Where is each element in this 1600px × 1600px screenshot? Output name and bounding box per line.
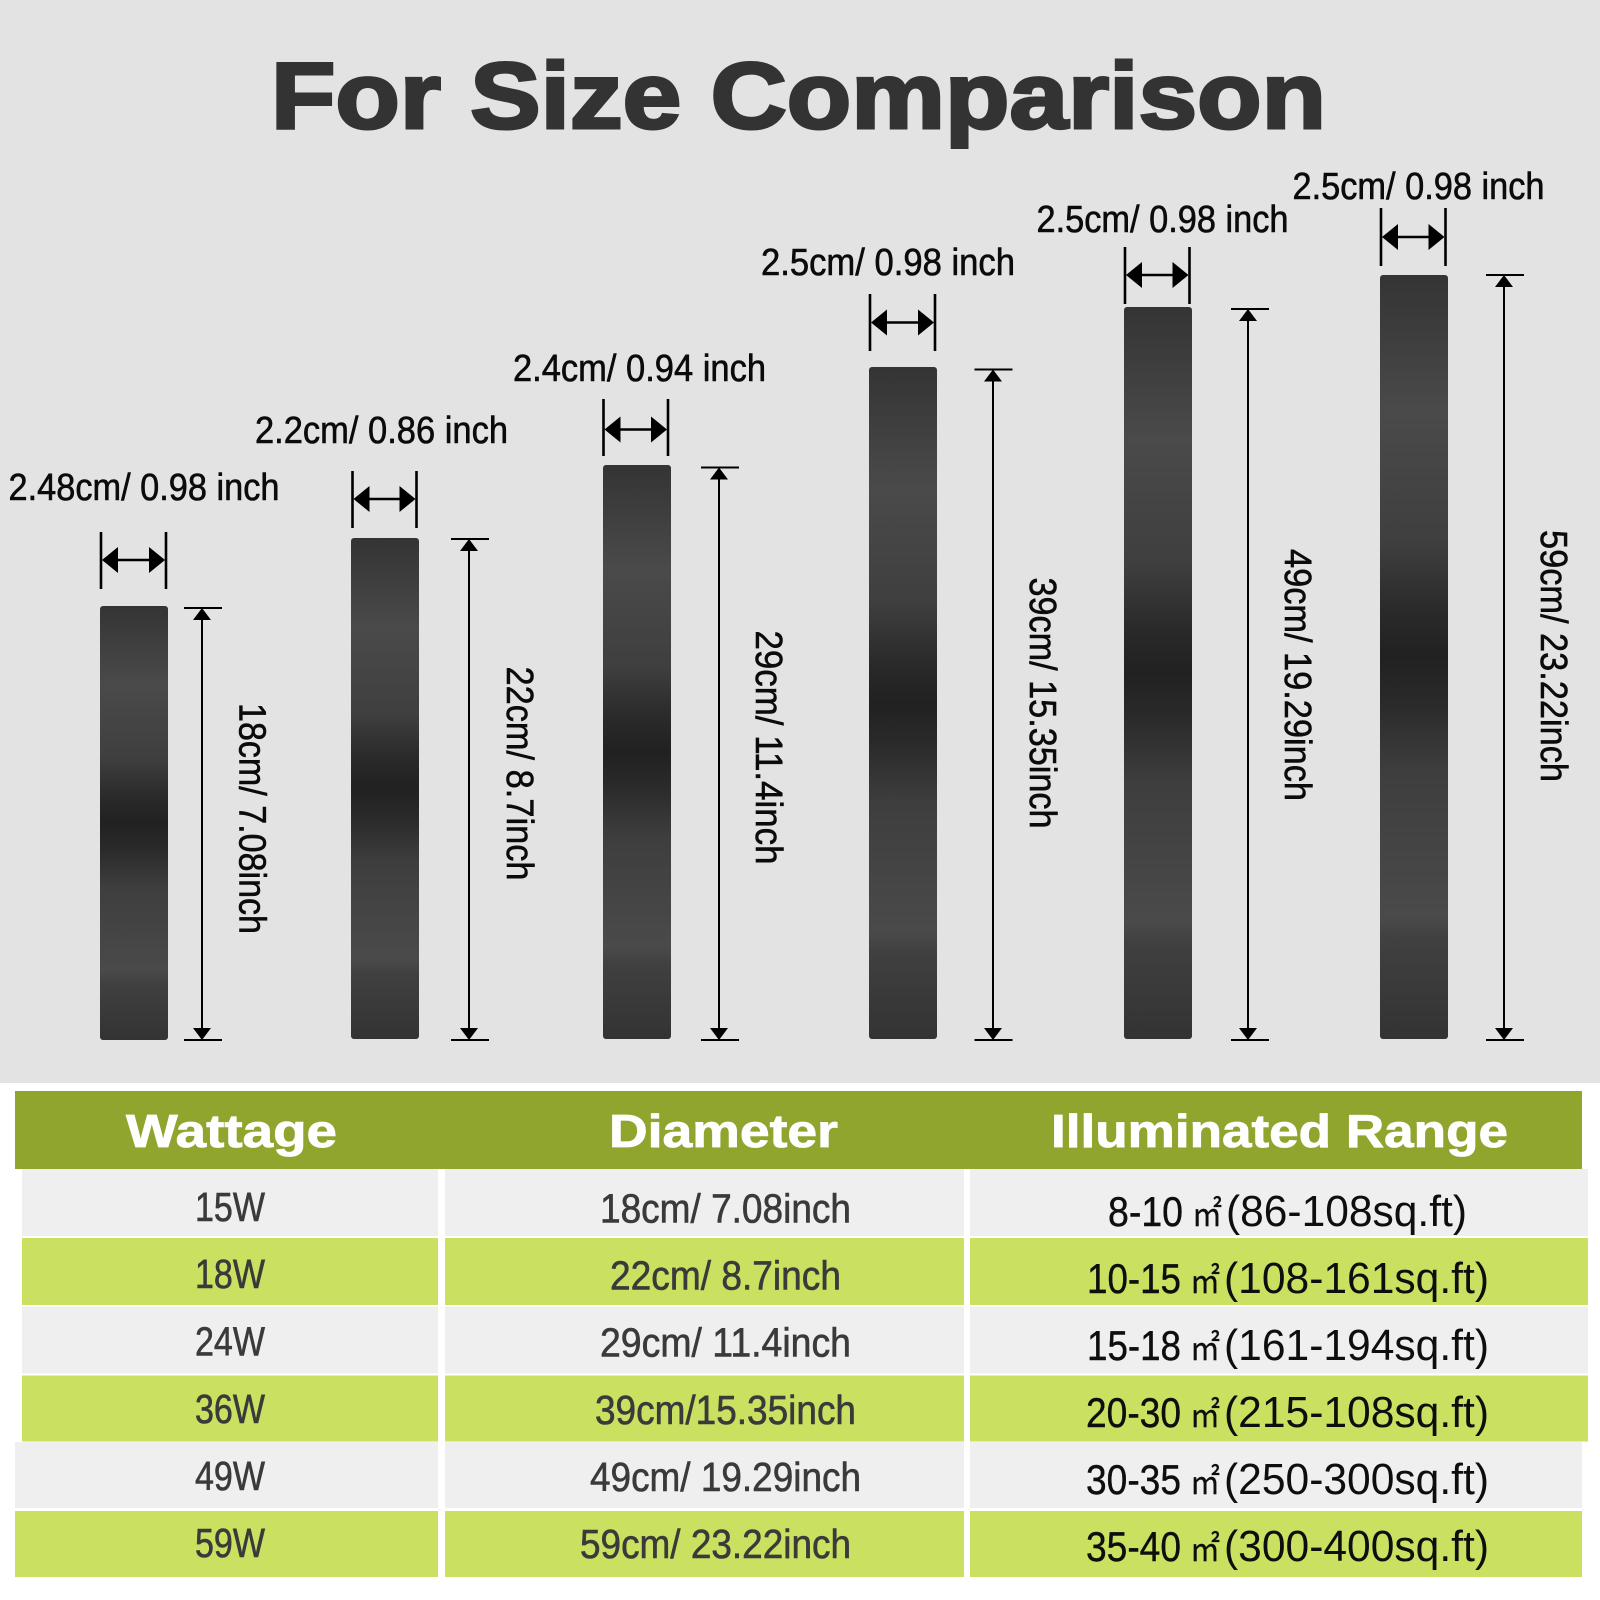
table row 49W: (250-300sq.ft) xyxy=(1224,1455,1489,1504)
lamp bar 18W xyxy=(351,538,419,1039)
table row 49W xyxy=(15,1442,1582,1508)
table row 49W: 49cm/ 19.29inch xyxy=(590,1454,861,1500)
table row 49W: 30-35 xyxy=(1086,1456,1181,1503)
table row 59W: 59W xyxy=(195,1520,265,1566)
table row 36W: ㎡ xyxy=(1190,1397,1220,1435)
lamp bar 49W xyxy=(1124,307,1192,1039)
table row 15W: ㎡ xyxy=(1192,1196,1222,1234)
height arrow 18W xyxy=(451,539,489,1040)
table row 36W: 36W xyxy=(195,1386,265,1432)
table row 24W: 29cm/ 11.4inch xyxy=(600,1320,851,1366)
lamp bar 36W xyxy=(869,367,937,1039)
height label 24W: 29cm/ 11.4inch xyxy=(747,630,789,864)
width arrow 15W xyxy=(101,532,166,589)
height label 49W: 49cm/ 19.29inch xyxy=(1276,549,1318,801)
table row 15W: 15W xyxy=(195,1184,265,1230)
title: For Size Comparison xyxy=(271,43,1326,148)
group: 36W lamp size xyxy=(761,242,1063,1040)
table row 49W: 49W xyxy=(195,1453,265,1499)
group: 59W lamp size xyxy=(1292,166,1574,1040)
width arrow 59W xyxy=(1381,208,1446,266)
lamp bar 59W xyxy=(1380,275,1448,1039)
table row 59W: 59cm/ 23.22inch xyxy=(580,1521,851,1567)
table header: Illuminated Range xyxy=(1051,1105,1508,1157)
table row 18W: ㎡ xyxy=(1190,1263,1220,1301)
width label 18W: 2.2cm/ 0.86 inch xyxy=(255,410,508,452)
width label 36W: 2.5cm/ 0.98 inch xyxy=(761,242,1015,284)
width label 24W: 2.4cm/ 0.94 inch xyxy=(513,348,766,390)
width arrow 24W xyxy=(604,399,668,456)
group: 49W lamp size xyxy=(1036,199,1318,1040)
width arrow 36W xyxy=(870,294,935,351)
table row 18W: (108-161sq.ft) xyxy=(1224,1254,1489,1303)
height label 18W: 22cm/ 8.7inch xyxy=(498,666,540,880)
width label 49W: 2.5cm/ 0.98 inch xyxy=(1036,199,1288,241)
table row 24W: (161-194sq.ft) xyxy=(1224,1321,1489,1370)
group: 15W lamp size xyxy=(8,467,280,1040)
lamp bar 24W xyxy=(603,465,671,1039)
table row 15W: 18cm/ 7.08inch xyxy=(600,1186,851,1232)
table row 24W: 15-18 xyxy=(1087,1322,1181,1369)
table row 18W: 10-15 xyxy=(1087,1255,1181,1302)
table row 15W xyxy=(22,1169,1588,1236)
table row 18W xyxy=(22,1238,1588,1305)
table row 36W xyxy=(22,1376,1588,1442)
table row 18W: 22cm/ 8.7inch xyxy=(610,1252,841,1298)
table row 59W: (300-400sq.ft) xyxy=(1224,1522,1489,1571)
lamp bar 15W xyxy=(100,606,168,1040)
table row 59W: ㎡ xyxy=(1190,1531,1220,1569)
table row 24W: 24W xyxy=(195,1318,265,1364)
table row 18W: 18W xyxy=(195,1251,265,1297)
width arrow 18W xyxy=(352,471,416,528)
table header xyxy=(15,1091,1582,1169)
height label 36W: 39cm/ 15.35inch xyxy=(1021,578,1063,828)
table row 59W xyxy=(15,1511,1582,1577)
height arrow 15W xyxy=(184,608,222,1040)
group: 18W lamp size xyxy=(255,410,540,1040)
table row 24W: ㎡ xyxy=(1190,1330,1220,1368)
table row 36W: 39cm/15.35inch xyxy=(595,1387,856,1433)
width label 59W: 2.5cm/ 0.98 inch xyxy=(1292,166,1544,208)
width label 15W: 2.48cm/ 0.98 inch xyxy=(8,467,280,509)
table row 15W: (86-108sq.ft) xyxy=(1226,1187,1467,1236)
height arrow 49W xyxy=(1231,309,1269,1040)
height arrow 24W xyxy=(701,468,739,1040)
group: 24W lamp size xyxy=(513,348,789,1040)
table row 36W: (215-108sq.ft) xyxy=(1224,1388,1489,1437)
table row 36W: 20-30 xyxy=(1086,1389,1181,1436)
table row 59W: 35-40 xyxy=(1086,1523,1181,1570)
table row 24W xyxy=(22,1306,1588,1374)
table row 49W: ㎡ xyxy=(1190,1464,1220,1502)
width arrow 49W xyxy=(1125,247,1190,304)
height arrow 59W xyxy=(1486,275,1524,1040)
height label 59W: 59cm/ 23.22inch xyxy=(1532,530,1574,782)
panel: specification table xyxy=(15,1091,1588,1577)
height arrow 36W xyxy=(974,370,1012,1040)
table header: Diameter xyxy=(609,1105,838,1157)
height label 15W: 18cm/ 7.08inch xyxy=(230,703,272,934)
panel: size comparison background xyxy=(0,0,1600,1083)
table row 15W: 8-10 xyxy=(1108,1188,1183,1235)
table header: Wattage xyxy=(126,1105,337,1157)
